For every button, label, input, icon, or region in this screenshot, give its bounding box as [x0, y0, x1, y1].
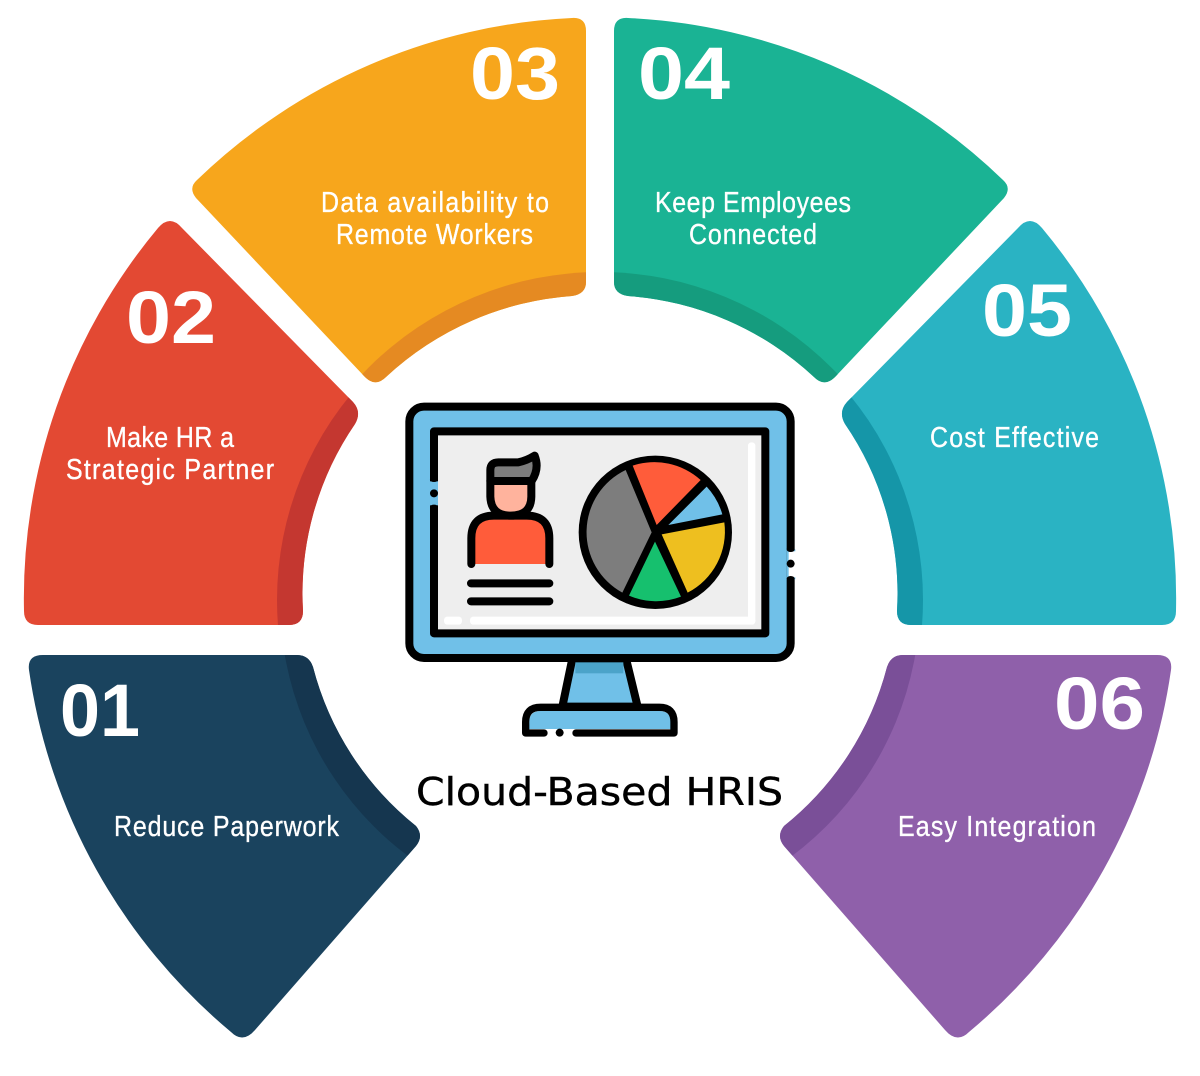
- panel: segment 05 Cost Effective: [842, 221, 1176, 625]
- label: Data availability to Remote Workers: Data availability to: [321, 186, 549, 218]
- number 03: 03: [470, 32, 560, 115]
- label: Keep Employees Connected: Keep Employees: [655, 186, 851, 218]
- number 06: 06: [1054, 662, 1145, 745]
- monitor body: [409, 407, 796, 658]
- inner dark band 04: [614, 272, 838, 382]
- label: Keep Employees Connected: Connected: [689, 218, 817, 250]
- label: Keep Employees Connected: [655, 186, 851, 250]
- pie chart: [579, 456, 732, 609]
- inner dark band 02: [277, 398, 358, 625]
- inner dark band 05: [842, 398, 923, 625]
- title: Cloud-Based HRIS: Cloud-Based HRIS: [416, 770, 783, 814]
- inner dark band 01: [285, 655, 420, 856]
- panel: segment 02 Make HR a Strategic Partner: [24, 221, 358, 625]
- label: Reduce Paperwork: Reduce Paperwork: [114, 810, 339, 842]
- number 05: 05: [982, 269, 1072, 352]
- segment shape 02: [24, 221, 358, 625]
- inner dark band 06: [780, 655, 916, 856]
- icon: person profile: [471, 456, 549, 601]
- segment shape 06: [780, 655, 1171, 1038]
- segment shape 04: [614, 18, 1008, 382]
- panel: segment 03 Data availability to Remote Workers: [192, 18, 586, 382]
- monitor screen: [430, 431, 765, 633]
- number 01: 01: [60, 669, 140, 752]
- label: Cost Effective: Cost Effective: [930, 421, 1099, 453]
- panel: segment 01 Reduce Paperwork: [28, 655, 420, 1038]
- inner dark band 03: [362, 272, 586, 382]
- label: Make HR a Strategic Partner: [66, 421, 274, 485]
- icon: computer monitor with profile and pie chart: [409, 407, 796, 737]
- number 04: 04: [638, 32, 730, 115]
- monitor stand: [526, 659, 674, 737]
- number 02: 02: [126, 276, 216, 359]
- label: Make HR a Strategic Partner: Make HR a: [106, 421, 235, 453]
- label: Easy Integration: Easy Integration: [898, 810, 1096, 842]
- segment shape 01: [29, 655, 420, 1038]
- segment shape 05: [842, 221, 1176, 625]
- label: Make HR a Strategic Partner: Strategic Partner: [66, 453, 274, 485]
- panel: segment 06 Easy Integration: [780, 655, 1172, 1038]
- label: Data availability to Remote Workers: [321, 186, 549, 250]
- label: Data availability to Remote Workers: Remote Workers: [336, 218, 533, 250]
- panel: segment 04 Keep Employees Connected: [614, 18, 1008, 382]
- segment shape 03: [192, 18, 586, 382]
